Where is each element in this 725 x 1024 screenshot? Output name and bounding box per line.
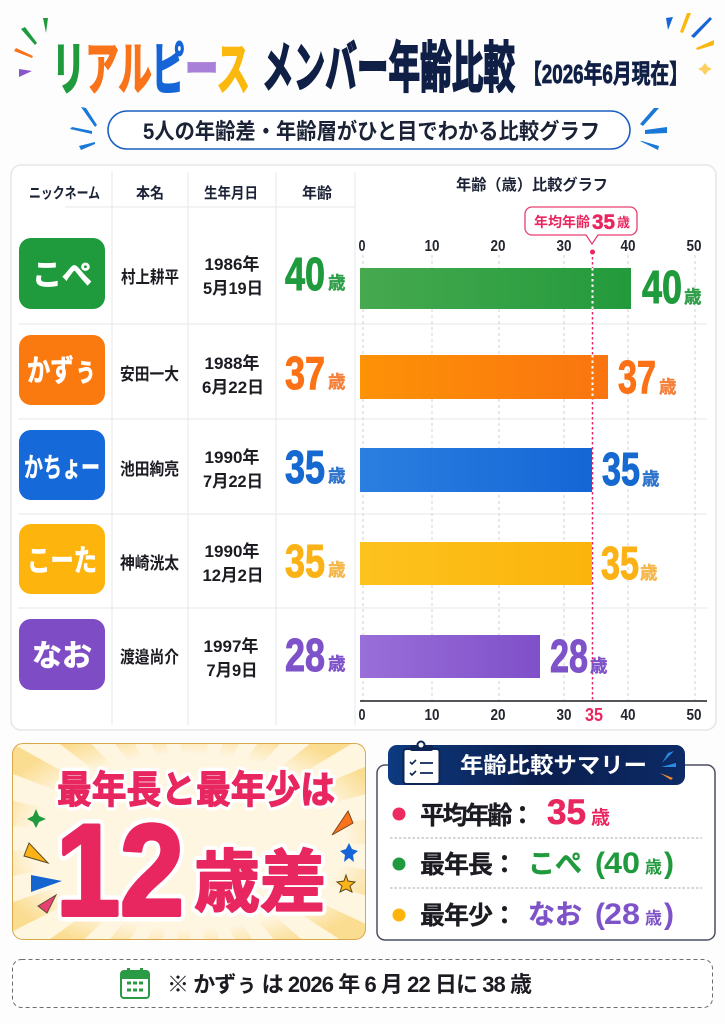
panel: summary [377, 742, 715, 940]
row: こーた: 12月2日 [202, 566, 264, 585]
summary header: 年齢比較サマリー [460, 753, 647, 778]
summary: average: 歳 [591, 807, 610, 829]
subtitle pill: 5人の年齢差・年齢層がひと目でわかる比較グラフ [143, 119, 600, 144]
row: かずぅ: 1988年 [204, 353, 260, 373]
row: かずぅ: 安田一大 [120, 365, 179, 384]
icon: calendar [121, 968, 149, 998]
chart bottom axis [358, 701, 707, 725]
row: かちょー: 池田絢亮 [120, 460, 179, 479]
big number 12: 12 [56, 797, 184, 939]
summary: youngest: 最年少： [420, 902, 517, 930]
chart top axis labels: 50 [686, 238, 702, 255]
chart bottom axis: 30 [556, 707, 572, 724]
chart top axis labels: 30 [556, 238, 572, 255]
row: かちょー [19, 430, 346, 500]
table header [29, 184, 332, 202]
row: かちょー: 歳 [328, 466, 346, 486]
row: なお [19, 619, 346, 690]
chart bottom axis: 0 [358, 707, 366, 724]
summary: average: 35 [547, 793, 586, 832]
summary: youngest: ) [664, 898, 674, 931]
row: こーた: 35 [285, 535, 325, 587]
chart bottom axis: 40 [620, 707, 636, 724]
panel: age gap banner [12, 743, 366, 940]
row: こぺ: 村上耕平 [121, 268, 179, 287]
bar value labels: 歳 [642, 469, 660, 489]
footnote: ※ かずぅ は 2026 年 6 月 22 日に 38 歳 [167, 972, 532, 997]
row: なお: 28 [285, 629, 325, 681]
bar value labels: 35 [601, 537, 639, 589]
row: こぺ: 1986年 [204, 254, 260, 274]
chart bottom axis: 35 [585, 705, 603, 725]
row: こぺ: こぺ [32, 259, 92, 292]
row: こぺ: 40 [285, 248, 325, 300]
row: こぺ: 歳 [328, 273, 346, 293]
average callout: 年均年齢 [534, 214, 590, 230]
summary: oldest: こぺ [528, 849, 582, 879]
row: こぺ: 5月19日 [203, 279, 263, 298]
icon: subtitle right sparks [640, 108, 667, 150]
banner heading: 最年長と最年少は [57, 770, 335, 812]
title: main text: メンバー年齢比較 [262, 37, 515, 99]
icon: right title sparks [666, 13, 714, 75]
summary: oldest [392, 847, 674, 880]
big text 歳差: 歳差 [194, 845, 326, 921]
row: こーた: 1990年 [204, 541, 260, 561]
summary: average [392, 793, 610, 832]
bar value labels: 歳 [684, 287, 702, 307]
footnote [12, 960, 712, 1008]
row: なお: 歳 [328, 654, 346, 674]
chart title: 年齢（歳）比較グラフ [456, 175, 608, 194]
summary: youngest: ( [595, 898, 605, 931]
table header: 年齢 [302, 184, 332, 202]
row: かちょー: 1990年 [204, 447, 260, 467]
summary: youngest: なお [528, 900, 582, 930]
bar value labels: 28 [550, 630, 588, 682]
icon: left confetti [24, 809, 62, 913]
bar value labels: 歳 [590, 656, 608, 676]
row: なお: 渡邉尚介 [120, 647, 179, 667]
table header: 本名 [136, 184, 164, 202]
summary: oldest: ) [664, 847, 674, 880]
summary: oldest: 歳 [645, 858, 662, 877]
chart top axis labels: 20 [490, 238, 506, 255]
summary: oldest: 最年長： [420, 851, 517, 879]
bar value labels: 歳 [640, 563, 658, 583]
row: かずぅ: 歳 [328, 372, 346, 392]
row: かずぅ: 37 [285, 347, 325, 399]
big text 歳差: 歳差 [194, 845, 326, 921]
summary: average: 平均年齢： [420, 802, 535, 830]
chart bottom axis: 10 [424, 707, 440, 724]
title: group name: リアルピース [52, 38, 250, 102]
summary: oldest: ( [595, 847, 605, 880]
row: なお: 7月9日 [206, 661, 258, 680]
summary: youngest: 歳 [645, 909, 662, 928]
big number 12: 12 [56, 797, 184, 939]
row: こーた: 神崎洸太 [120, 554, 179, 573]
subtitle pill [108, 111, 630, 149]
bar value labels: 37 [618, 351, 656, 403]
row: かずぅ [19, 335, 346, 405]
banner heading: 最年長と最年少は [57, 770, 335, 812]
chart top axis labels: 40 [620, 238, 636, 255]
bar: こーた 35 [360, 542, 592, 585]
chart top axis labels: 10 [424, 238, 440, 255]
bar: かちょー 35 [360, 448, 592, 492]
bar: こぺ 40 [360, 268, 631, 309]
chart top axis labels [358, 238, 702, 255]
summary: youngest [392, 898, 674, 931]
bar: なお 28 [360, 635, 540, 678]
chart [358, 175, 707, 725]
chart top axis labels: 0 [358, 238, 366, 255]
row: なお: 1997年 [204, 636, 258, 656]
bar: かずぅ 37 [360, 355, 608, 399]
icon: right confetti [332, 811, 358, 892]
chart bottom axis: 20 [490, 707, 506, 724]
average callout: 歳 [617, 215, 630, 230]
row: かずぅ: 6月22日 [202, 378, 264, 397]
bar value labels [550, 261, 702, 682]
row: こーた: 歳 [328, 560, 346, 580]
row: かちょー: 7月22日 [203, 472, 263, 491]
table header: 生年月日 [204, 184, 258, 202]
row: こぺ [19, 238, 346, 309]
average callout: 35 [592, 211, 615, 234]
row: かちょー: かちょー [24, 453, 100, 483]
average line behind bars [590, 250, 595, 700]
icon: clipboard [404, 742, 440, 784]
bar value labels: 40 [642, 261, 682, 313]
summary: oldest: 40 [604, 847, 640, 880]
row: こーた [19, 524, 346, 594]
row: こーた: こーた [27, 545, 97, 578]
row: かずぅ: かずぅ [27, 355, 97, 388]
average callout [525, 207, 637, 244]
icon: subtitle left sparks [70, 107, 97, 150]
summary header [388, 745, 685, 785]
bar value labels: 35 [602, 443, 640, 495]
summary: youngest: 28 [604, 898, 640, 931]
title [52, 37, 688, 102]
row: かちょー: 35 [285, 441, 325, 493]
chart bottom axis: 50 [686, 707, 702, 724]
table header: ニックネーム [29, 185, 100, 202]
icon: left title sparks [14, 18, 48, 77]
average line over bars [592, 268, 594, 399]
row: なお: なお [32, 640, 92, 673]
bar value labels: 歳 [659, 377, 677, 397]
panel: comparison table and chart [11, 165, 716, 730]
